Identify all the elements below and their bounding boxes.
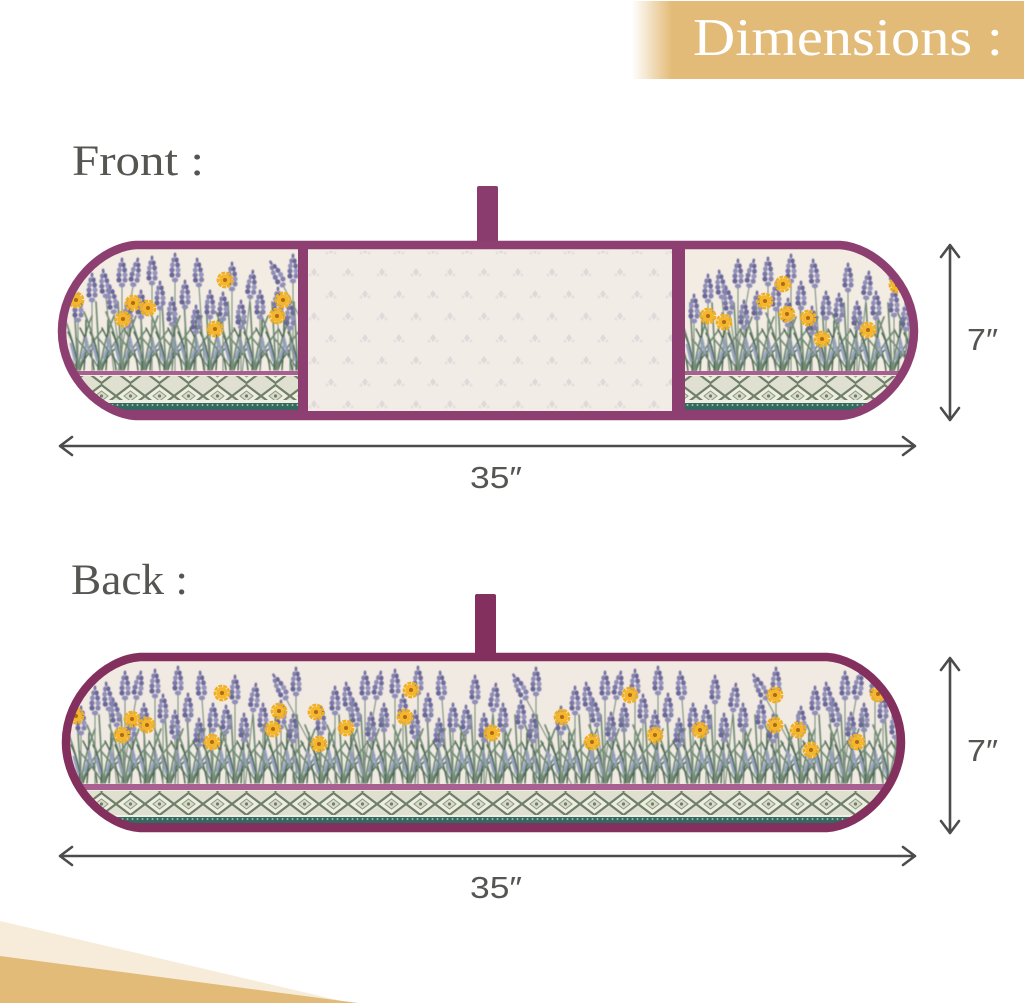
width label: front: 35″ — [470, 460, 522, 495]
height label: back: 7″ — [967, 733, 998, 768]
heading: Back: Back : — [71, 557, 188, 604]
heading: Front: Front : — [72, 138, 204, 185]
width arrow: back — [60, 847, 915, 865]
flowers: front right — [701, 277, 904, 346]
back oven glove — [62, 594, 906, 832]
centre insulated panel — [308, 251, 672, 411]
border band: back — [82, 784, 884, 824]
height arrow: front — [941, 245, 959, 420]
height arrow: back — [941, 658, 959, 833]
binding: front — [62, 245, 914, 416]
heading: Dimensions: Dimensions : — [693, 9, 1003, 67]
front oven glove — [54, 186, 950, 431]
border band: front — [77, 371, 899, 412]
flowers: front left — [69, 273, 290, 336]
floral print: front left — [66, 252, 298, 371]
floral print: back — [70, 665, 897, 784]
separators — [298, 246, 685, 416]
width label: back: 35″ — [470, 870, 522, 905]
binding: back — [66, 657, 901, 828]
flowers: back — [69, 683, 885, 757]
glove fabric: front — [66, 249, 910, 412]
width arrow: front — [60, 437, 915, 455]
glove fabric: back — [70, 661, 897, 824]
corner accent — [0, 921, 358, 1003]
hanging loop: back — [475, 594, 496, 658]
height label: front: 7″ — [967, 322, 998, 357]
floral print: front right — [685, 253, 910, 371]
hanging loop: front — [477, 186, 498, 244]
header banner — [632, 1, 1024, 79]
